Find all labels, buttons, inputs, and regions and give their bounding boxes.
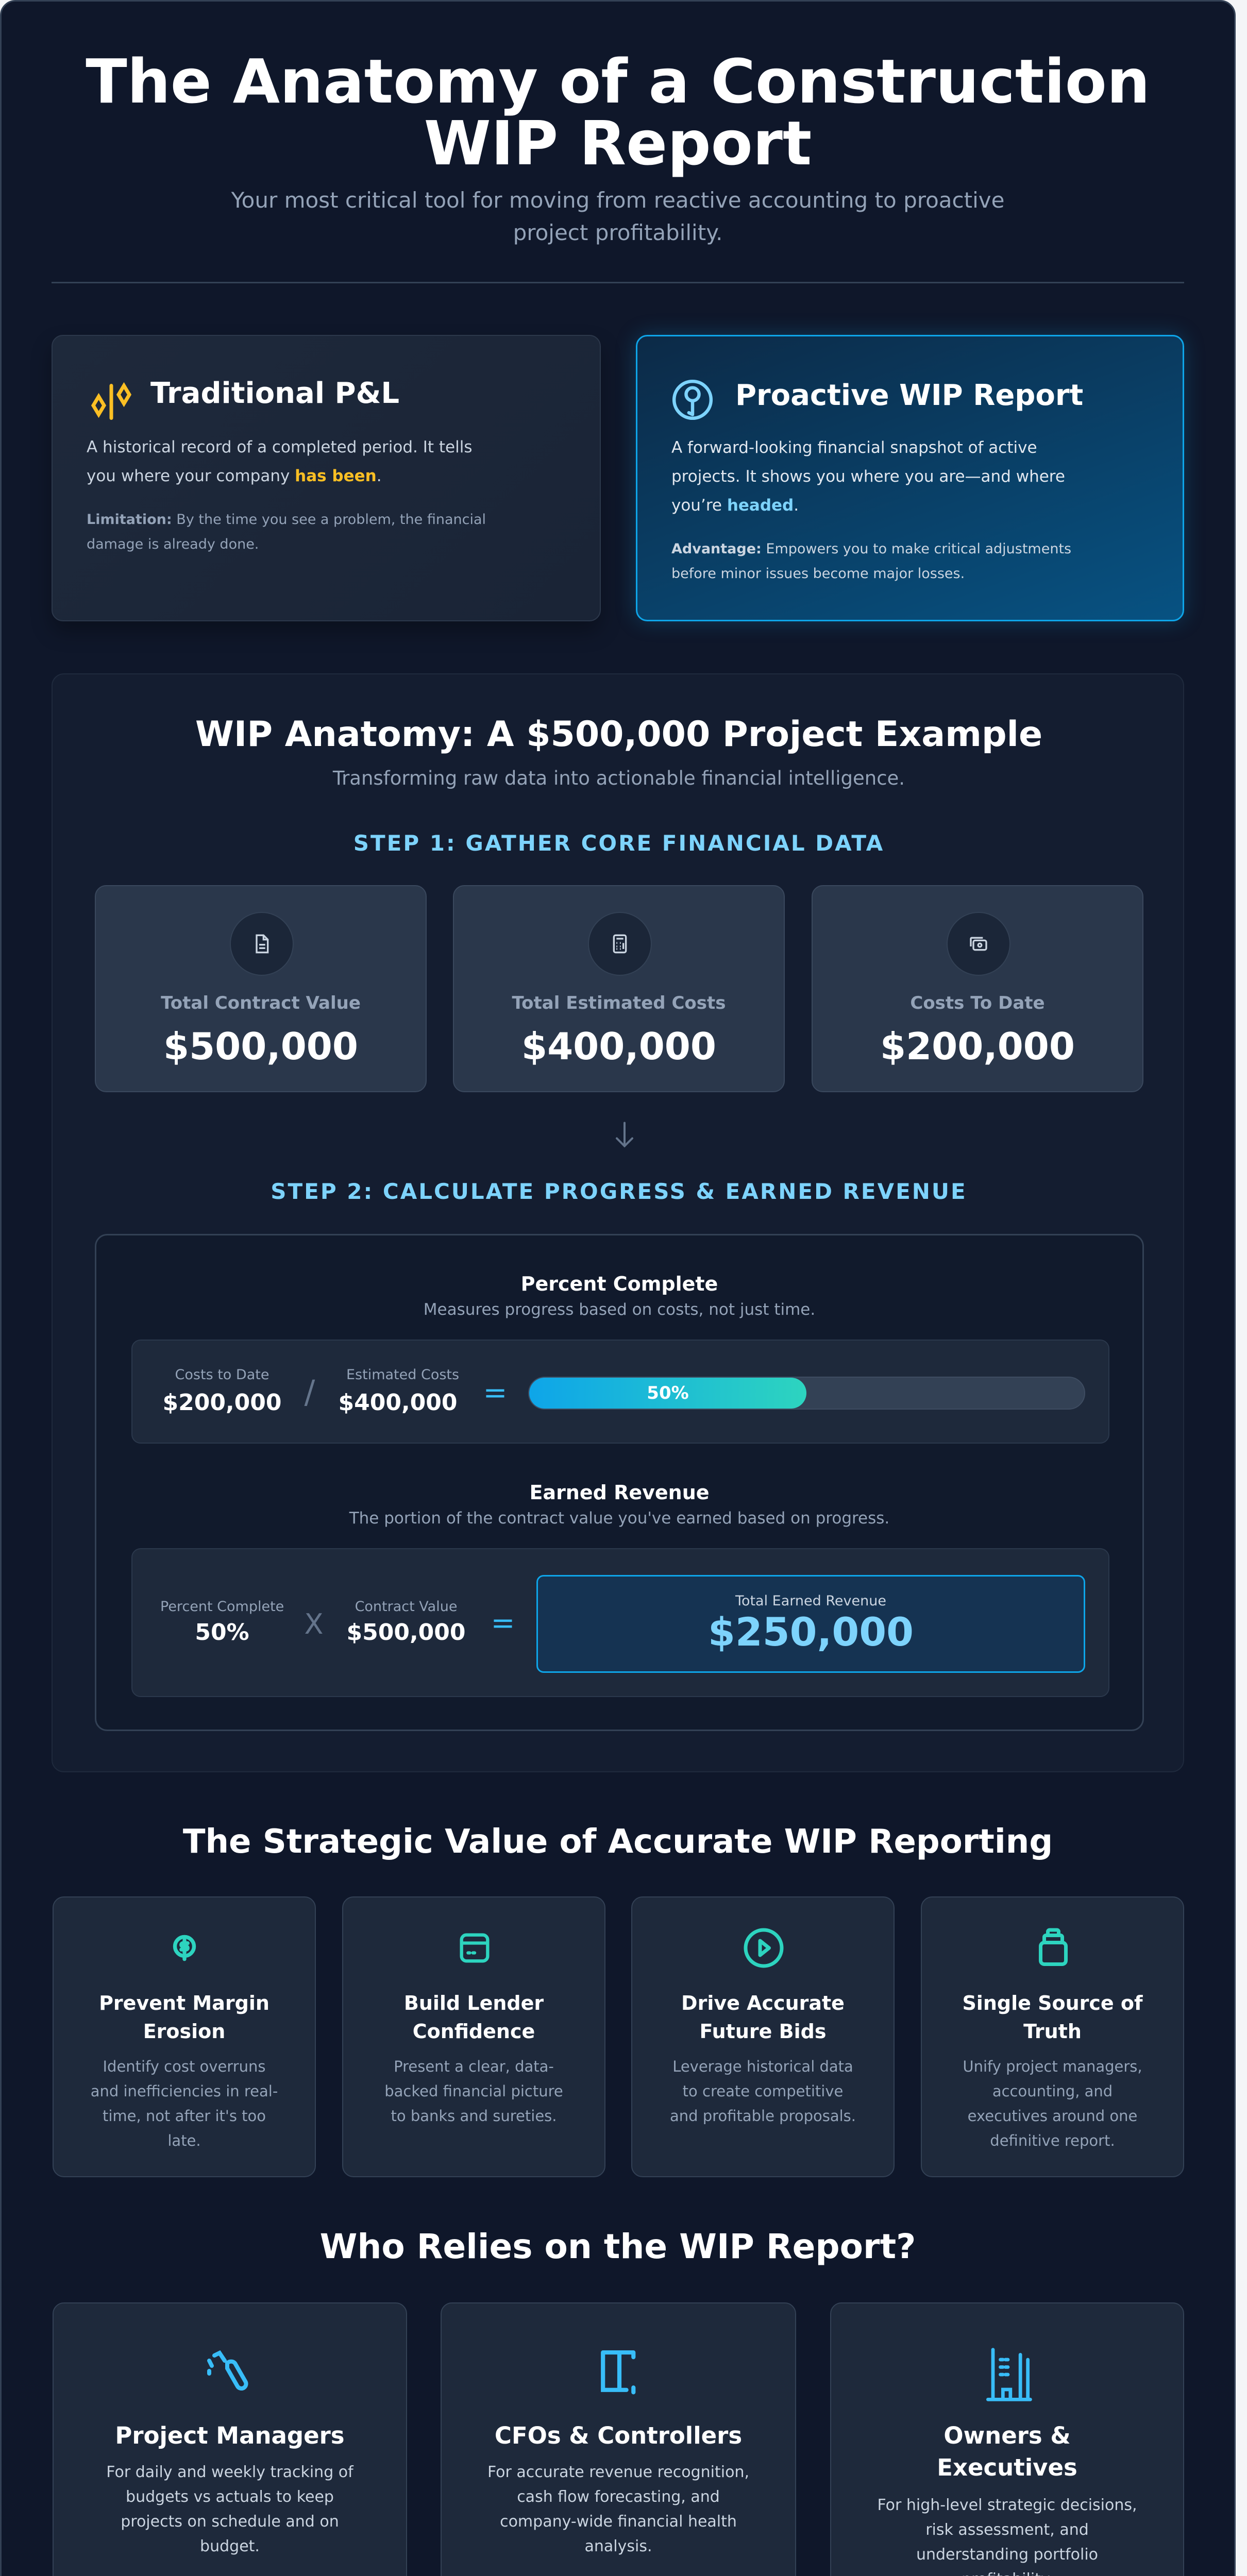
panel: traditional P&L bbox=[52, 335, 601, 621]
icon: compass bbox=[672, 380, 713, 420]
formula: percent complete: $400,000 bbox=[338, 1389, 458, 1416]
limitation bbox=[87, 512, 486, 552]
text: definitive report. bbox=[990, 2132, 1115, 2149]
title: Owners & bbox=[943, 2422, 1071, 2449]
title bbox=[99, 1992, 269, 2043]
icon: money bbox=[947, 912, 1010, 976]
formula: earned revenue: Contract Value bbox=[355, 1599, 457, 1615]
text bbox=[671, 438, 1065, 515]
text: projects. It shows you where you are—and where bbox=[671, 467, 1065, 486]
result box: $250,000 bbox=[708, 1609, 914, 1655]
formula: earned revenue: X bbox=[304, 1608, 324, 1640]
role card: CFOs bbox=[441, 2302, 796, 2576]
text: you’re headed. bbox=[671, 496, 799, 515]
text bbox=[963, 2058, 1142, 2149]
text: budget. bbox=[200, 2537, 260, 2555]
formula: percent complete: $200,000 bbox=[162, 1389, 282, 1416]
icon: calculator bbox=[588, 912, 652, 976]
heading: strategic value: The Strategic Value of Accurate WIP Reporting bbox=[183, 1823, 1053, 1861]
formula: earned revenue: Percent Complete bbox=[160, 1599, 284, 1615]
formula: percent complete: Estimated Costs bbox=[346, 1367, 459, 1383]
value card: future bids bbox=[631, 1896, 895, 2177]
formula: earned revenue: = bbox=[491, 1606, 515, 1640]
text: executives around one bbox=[968, 2107, 1137, 2125]
title: Erosion bbox=[143, 2020, 225, 2043]
text: to banks and sureties. bbox=[391, 2107, 557, 2125]
text bbox=[487, 2463, 749, 2555]
text bbox=[87, 438, 472, 485]
title: Drive Accurate bbox=[681, 1992, 845, 2014]
advantage: Advantage: Empowers you to make critical adjustments bbox=[671, 541, 1071, 557]
calculation panel bbox=[95, 1234, 1144, 1731]
value: $200,000 bbox=[880, 1025, 1075, 1068]
text: The portion of the contract value you've earned based on progress. bbox=[349, 1509, 889, 1528]
text: time, not after it's too bbox=[103, 2107, 266, 2125]
text: projects on schedule and on bbox=[121, 2513, 339, 2531]
icon: scales bbox=[91, 382, 131, 420]
panel: proactive WIP bbox=[636, 335, 1184, 621]
text bbox=[91, 2058, 278, 2149]
icon: dollar bbox=[173, 1935, 196, 1961]
result box bbox=[536, 1575, 1085, 1673]
text bbox=[831, 2493, 1183, 2576]
title: Confidence bbox=[413, 2020, 535, 2043]
formula: earned revenue: $500,000 bbox=[346, 1619, 466, 1646]
text: Leverage historical data bbox=[672, 2058, 853, 2075]
text: Measures progress based on costs, not just time. bbox=[424, 1300, 815, 1319]
text: budgets vs actuals to keep bbox=[126, 2488, 334, 2506]
subtitle: project profitability. bbox=[513, 220, 722, 245]
text: For accurate revenue recognition, bbox=[487, 2463, 749, 2481]
arrow: down bbox=[615, 1122, 633, 1148]
limitation: Limitation: By the time you see a problem, the financial bbox=[87, 512, 486, 528]
icon: card bbox=[460, 1933, 490, 1963]
icon: building bbox=[977, 2345, 1039, 2404]
title bbox=[86, 46, 1150, 179]
text: risk assessment, and bbox=[925, 2521, 1089, 2539]
role card: owners bbox=[830, 2302, 1184, 2576]
formula: earned revenue: 50% bbox=[195, 1619, 249, 1646]
value card: single source bbox=[921, 1896, 1184, 2177]
text: Unify project managers, bbox=[963, 2058, 1142, 2075]
data card: contract value bbox=[95, 885, 427, 1092]
result box: Total Earned Revenue bbox=[735, 1593, 886, 1609]
title: Prevent Margin bbox=[99, 1992, 269, 2014]
text bbox=[670, 2058, 856, 2125]
title: Executives bbox=[937, 2454, 1077, 2481]
text: and inefficiencies in real- bbox=[91, 2082, 278, 2100]
step 1 heading: STEP 1: GATHER CORE FINANCIAL DATA bbox=[353, 831, 884, 856]
title bbox=[831, 2420, 1183, 2484]
progress bar: 50% bbox=[647, 1383, 689, 1403]
data card: estimated costs bbox=[453, 885, 785, 1092]
icon: play circle bbox=[744, 1928, 783, 1968]
text: company-wide financial health bbox=[500, 2513, 737, 2531]
subtitle bbox=[231, 188, 1004, 245]
text: accounting, and bbox=[992, 2082, 1113, 2100]
heading: who relies: Who Relies on the WIP Report? bbox=[320, 2227, 916, 2266]
formula: percent complete: / bbox=[305, 1373, 315, 1411]
advantage: before minor issues become major losses. bbox=[671, 566, 965, 582]
text: For daily and weekly tracking of bbox=[106, 2463, 353, 2481]
text: analysis. bbox=[584, 2537, 652, 2555]
text: and profitable proposals. bbox=[670, 2107, 856, 2125]
title: Single Source of bbox=[962, 1992, 1143, 2014]
label: Costs To Date bbox=[910, 993, 1045, 1013]
step 2 heading: STEP 2: CALCULATE PROGRESS & EARNED REVENUE bbox=[271, 1179, 967, 1204]
value: $400,000 bbox=[521, 1025, 716, 1068]
value: $500,000 bbox=[163, 1025, 358, 1068]
text: Identify cost overruns bbox=[103, 2058, 266, 2075]
text bbox=[106, 2463, 353, 2555]
title: CFOs & Controllers bbox=[495, 2422, 742, 2449]
title: Truth bbox=[1023, 2020, 1082, 2043]
limitation: damage is already done. bbox=[87, 536, 259, 552]
text: you where your company has been. bbox=[87, 467, 382, 485]
icon: beam bbox=[601, 2350, 636, 2395]
advantage bbox=[671, 541, 1071, 582]
text: to create competitive bbox=[683, 2082, 843, 2100]
icon: document bbox=[230, 912, 294, 976]
title: The Anatomy of a Construction bbox=[86, 46, 1150, 117]
heading: Proactive WIP Report bbox=[735, 379, 1083, 412]
data card: costs to date bbox=[812, 885, 1143, 1092]
subheading: Transforming raw data into actionable financial intelligence. bbox=[333, 767, 905, 789]
formula: percent complete bbox=[131, 1340, 1109, 1444]
heading: Traditional P&L bbox=[150, 377, 399, 410]
text: late. bbox=[167, 2132, 201, 2149]
panel: WIP anatomy bbox=[52, 673, 1184, 1772]
heading: percent complete: Percent Complete bbox=[521, 1273, 718, 1295]
text: understanding portfolio bbox=[916, 2546, 1098, 2564]
text: A historical record of a completed period. It tells bbox=[87, 438, 472, 456]
value card: lender confidence bbox=[342, 1896, 605, 2177]
label: Total Estimated Costs bbox=[512, 993, 726, 1013]
text: A forward-looking financial snapshot of active bbox=[671, 438, 1037, 457]
title bbox=[404, 1992, 544, 2043]
icon: stack bbox=[1039, 1928, 1068, 1966]
title bbox=[962, 1992, 1143, 2043]
role card: project managers bbox=[53, 2302, 407, 2576]
title: Project Managers bbox=[115, 2422, 345, 2449]
icon: tools bbox=[207, 2350, 248, 2391]
label: Total Contract Value bbox=[161, 993, 361, 1013]
value card: margin erosion bbox=[53, 1896, 316, 2177]
text: backed financial picture bbox=[384, 2082, 563, 2100]
subtitle: Your most critical tool for moving from reactive accounting to proactive bbox=[231, 188, 1004, 213]
text: Present a clear, data- bbox=[394, 2058, 554, 2075]
progress bar bbox=[528, 1377, 1085, 1410]
text: cash flow forecasting, and bbox=[517, 2488, 720, 2506]
title: WIP Report bbox=[424, 108, 812, 179]
formula: percent complete: Costs to Date bbox=[175, 1367, 269, 1383]
title: Build Lender bbox=[404, 1992, 544, 2014]
heading: earned revenue: Earned Revenue bbox=[529, 1481, 710, 1504]
text bbox=[384, 2058, 563, 2125]
formula: percent complete: = bbox=[483, 1376, 507, 1410]
text: For high-level strategic decisions, bbox=[877, 2496, 1137, 2514]
formula: earned revenue bbox=[131, 1548, 1109, 1697]
heading: WIP Anatomy: A $500,000 Project Example bbox=[195, 714, 1042, 755]
title: Future Bids bbox=[700, 2020, 826, 2043]
title bbox=[681, 1992, 845, 2043]
